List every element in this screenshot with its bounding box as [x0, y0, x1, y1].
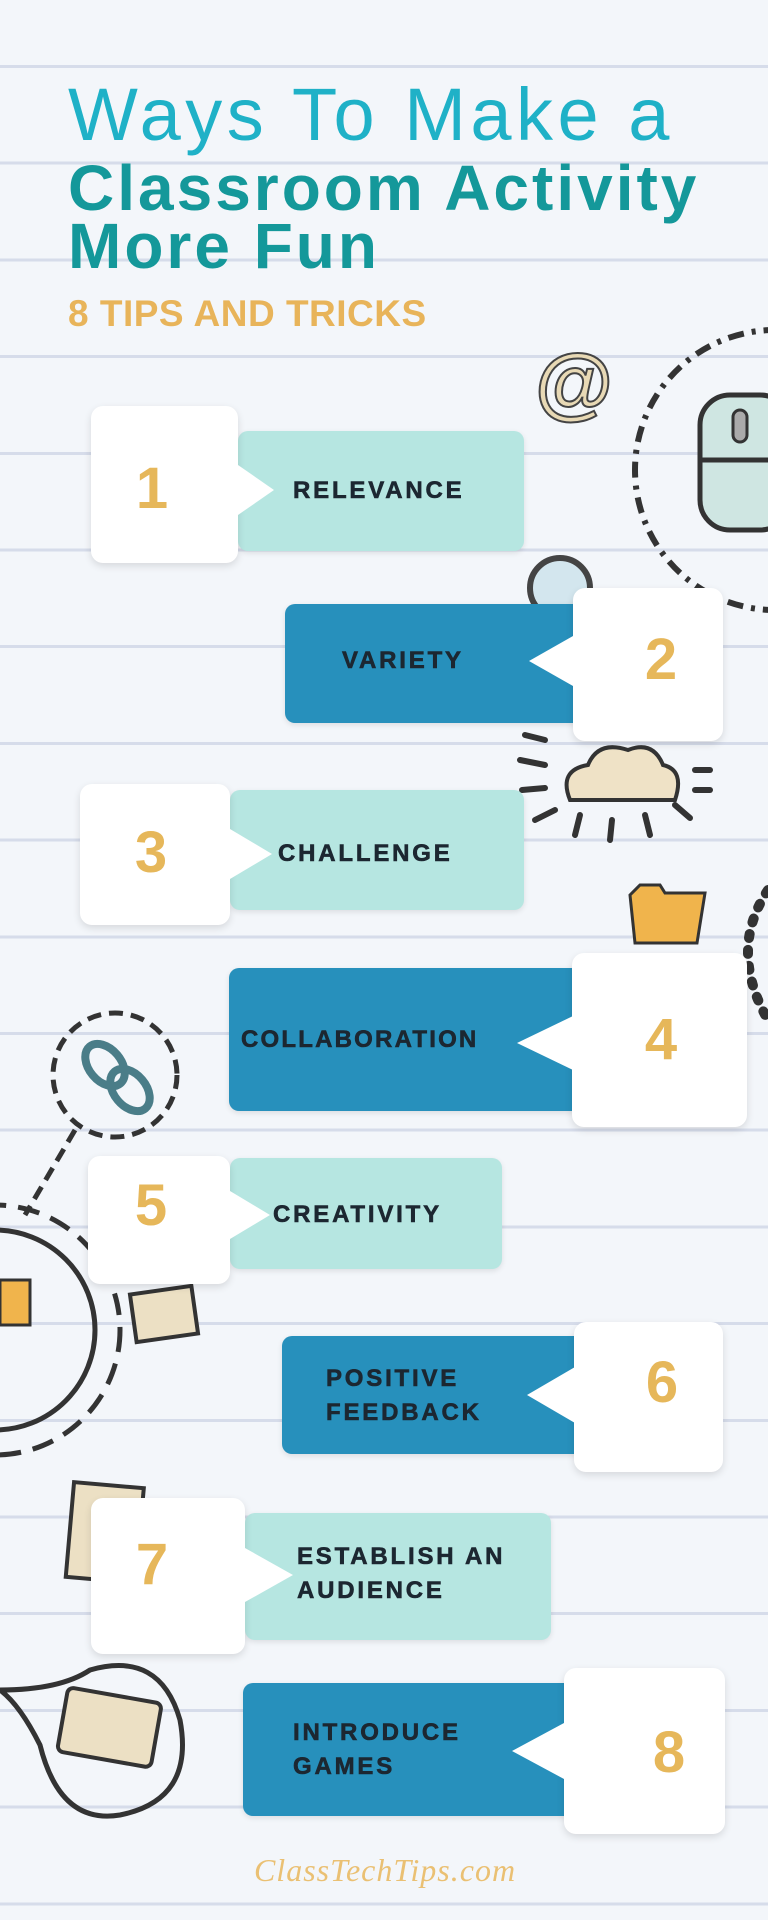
item 7: AUDIENCE — [297, 1577, 445, 1604]
title line 2: Classroom Activity — [68, 152, 699, 224]
item 8: GAMES — [293, 1753, 395, 1780]
item 8: INTRODUCE — [293, 1719, 461, 1746]
item 1: 1 — [136, 456, 168, 521]
icon: folder — [630, 885, 705, 943]
item 6: 6 — [646, 1350, 678, 1415]
item 3: CHALLENGE — [278, 840, 453, 867]
item 7: ESTABLISH AN — [297, 1543, 505, 1570]
item 4: COLLABORATION — [241, 1026, 478, 1053]
item 3 — [78, 784, 525, 930]
item 5: CREATIVITY — [273, 1201, 442, 1228]
icon: cards — [66, 1482, 144, 1583]
title line 2: More Fun — [68, 210, 380, 282]
item 6: FEEDBACK — [326, 1399, 482, 1426]
item 2 — [284, 588, 725, 746]
icon: at sign: @ — [535, 338, 613, 427]
item 6: POSITIVE — [326, 1365, 459, 1392]
item 4: 4 — [645, 1007, 677, 1072]
item 6 — [281, 1322, 725, 1477]
item 7: 7 — [136, 1532, 168, 1597]
item 8: 8 — [653, 1720, 685, 1785]
item 7 — [89, 1498, 552, 1659]
icon: envelope — [130, 1286, 198, 1342]
item 5: 5 — [135, 1173, 167, 1238]
title line 2 — [68, 152, 699, 282]
icon: at sign small — [530, 558, 590, 618]
icon: big left circle — [0, 1205, 120, 1455]
item 2: VARIETY — [342, 647, 464, 674]
icon: mouse in dashed circle — [635, 330, 768, 610]
item 1 — [89, 406, 525, 568]
icon: chain link dashed circle — [25, 1013, 177, 1215]
item 5 — [86, 1156, 503, 1289]
item 3: 3 — [135, 820, 167, 885]
footer: website: ClassTechTips.com — [254, 1852, 516, 1888]
icon: cloud with rays — [520, 735, 710, 840]
item 2: 2 — [645, 627, 677, 692]
subtitle: 8 TIPS AND TRICKS — [68, 293, 427, 334]
title — [68, 73, 699, 282]
icon: dotted arc right — [748, 890, 768, 1020]
item 8 — [242, 1668, 727, 1839]
item 4 — [228, 953, 749, 1132]
icon: id card speech bubble — [0, 1666, 182, 1816]
item 1: RELEVANCE — [293, 477, 464, 504]
title line 1: Ways To Make a — [68, 73, 674, 156]
